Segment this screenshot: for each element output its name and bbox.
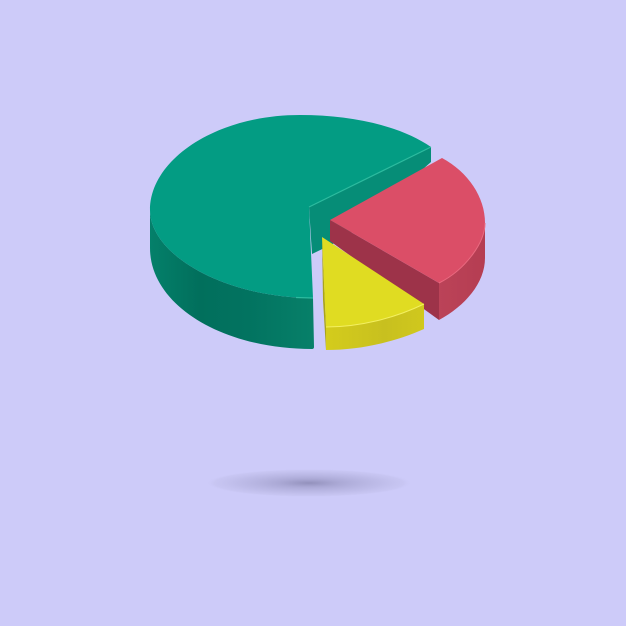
pie slice: red segment [330,158,485,320]
yellow top face [322,237,424,327]
yellow left wall [322,237,326,350]
red cut wall [330,220,439,320]
floating shadow [206,469,412,497]
yellow outer side wall [326,304,424,350]
pie slice: yellow segment [322,237,424,350]
green top face [150,115,431,298]
yellow edge highlight [326,304,424,327]
red edge highlight [439,223,485,283]
green inner cut wall [309,147,431,254]
pie slice: green large segment [150,115,431,349]
green outer side wall [150,210,314,349]
red top face [330,158,485,283]
green top highlight edges [296,147,431,298]
red outer side wall [439,223,485,320]
